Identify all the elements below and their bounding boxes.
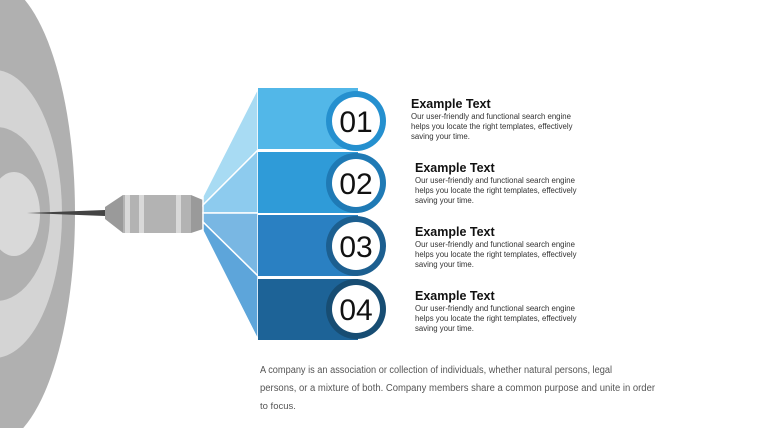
text block 04: helps you locate the right templates, effectively: [415, 314, 577, 323]
text block 02: [415, 161, 577, 205]
text block 03: Example Text: [415, 225, 496, 239]
text block 03: saving your time.: [415, 260, 474, 269]
text block 02: Example Text: [415, 161, 496, 175]
fan connecting dart to bars: [203, 88, 258, 340]
text block 02: saving your time.: [415, 196, 474, 205]
text block 04: [415, 289, 577, 333]
footer paragraph: to focus.: [260, 401, 296, 412]
text block 02: helps you locate the right templates, effectively: [415, 186, 577, 195]
text block 01: helps you locate the right templates, effectively: [411, 122, 573, 131]
step 03 bar: 03: [339, 231, 373, 264]
text block 03: [415, 225, 577, 269]
footer paragraph: A company is an association or collection of individuals, whether natural persons, legal: [260, 365, 612, 376]
text block 01: saving your time.: [411, 132, 470, 141]
step 02 bar: [258, 152, 386, 213]
step 04 bar: 04: [339, 294, 373, 327]
step 03 bar: [258, 215, 386, 276]
footer paragraph: [260, 365, 656, 412]
text block 03: Our user-friendly and functional search engine: [415, 240, 575, 249]
text block 01: Our user-friendly and functional search engine: [411, 112, 571, 121]
text block 03: helps you locate the right templates, effectively: [415, 250, 577, 259]
text block 04: saving your time.: [415, 324, 474, 333]
step 04 bar: [258, 279, 386, 340]
text block 01: [411, 97, 573, 141]
footer paragraph: persons, or a mixture of both. Company members share a common purpose and unite in order: [260, 383, 656, 394]
step 02 bar: 02: [339, 168, 373, 201]
text block 04: Our user-friendly and functional search engine: [415, 304, 575, 313]
text block 01: Example Text: [411, 97, 492, 111]
icon: dart: [27, 195, 213, 233]
step 01 bar: [258, 88, 386, 151]
icon: dartboard target: [0, 0, 75, 428]
text block 02: Our user-friendly and functional search engine: [415, 176, 575, 185]
step 01 bar: 01: [339, 106, 373, 139]
text block 04: Example Text: [415, 289, 496, 303]
